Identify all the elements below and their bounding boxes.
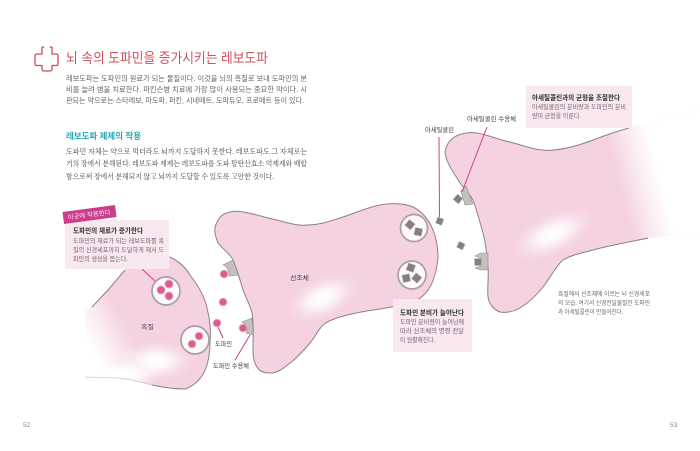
- icon: medical cross: [35, 46, 58, 71]
- receptor: dopamine upper: [223, 260, 238, 276]
- label: dopamine: 도파민: [215, 339, 232, 348]
- vesicle: acetylcholine upper: [400, 214, 428, 242]
- callout: acetylcholine balance: 량이 균형을 이룬다.: [532, 111, 581, 120]
- callout: precursor increases: 도파민의 재료가 되는 레보도파를 흑: [73, 236, 164, 245]
- vesicle: acetylcholine lower: [398, 261, 426, 289]
- callout: precursor increases: [65, 220, 169, 269]
- label: dopamine receptor: 도파민 수용체: [213, 361, 249, 370]
- callout: precursor increases: 도파민의 재료가 증가한다: [73, 226, 144, 235]
- label: substantia nigra: 흑질: [141, 322, 154, 331]
- text block: levodopa action: 도파민 자체는 약으로 먹더라도 뇌까지 도달하지 못한다. 레보도파도 그 자체로는: [66, 146, 308, 156]
- caption: 과 아세틸콜린이 만들어진다.: [558, 308, 623, 316]
- vesicle: dopamine: [181, 326, 209, 354]
- tag: acts here: [62, 205, 116, 224]
- vesicle: dopamine precursor: [152, 277, 180, 305]
- label: acetylcholine: 아세틸콜린: [425, 125, 454, 134]
- acetylcholine molecules: [436, 194, 482, 266]
- callout: precursor increases: 파민의 생성을 돕는다.: [73, 254, 128, 263]
- page number right: 53: [670, 422, 678, 429]
- callout: dopamine secretion increases: [393, 299, 472, 352]
- caption: 흑질에서 선조체에 이르는 뇌 신경세포: [558, 290, 650, 298]
- label: striatum: 선조체: [290, 273, 309, 282]
- dopamine molecules: [213, 270, 247, 332]
- neuron: substantia nigra: [85, 256, 211, 390]
- callout: acetylcholine balance: 아세틸콜린과의 균형을 조절한다: [532, 93, 621, 102]
- tag: acts here: 이곳에 작용한다: [67, 207, 111, 221]
- title: 뇌 속의 도파민을 증가시키는 레보도파: [66, 50, 268, 66]
- callout: dopamine secretion increases: 이 원활해진다.: [400, 335, 435, 344]
- text block: levodopa action: 함으로써 장에서 분해되지 않고 뇌까지 도달할 수 있도록 고안한 것이다.: [66, 171, 274, 181]
- callout: precursor increases: 질의 신경세포까지 도달하게 해서 도: [73, 245, 164, 254]
- text block: levodopa action: 거의 장에서 분해된다. 레보도파 제제는 레보도파를 도파 탈탄산효소 억제제와 배합: [66, 158, 308, 168]
- text block: introduction: [66, 74, 307, 105]
- caption: 의 모습. 여기서 신경전달물질인 도파민: [558, 299, 650, 307]
- caption: [558, 290, 650, 316]
- receptor: acetylcholine right: [475, 253, 488, 270]
- neuron: striatum: [214, 203, 438, 374]
- neuron: acetylcholine side: [440, 105, 700, 320]
- text block: levodopa action: [66, 146, 308, 181]
- callout: dopamine secretion increases: 도파민 분비가 늘어난다: [400, 308, 465, 317]
- text block: introduction: 판되는 약으로는 스타레보, 마도파, 퍼킨, 시네메트, 도파듀오, 프로메트 등이 있다.: [66, 96, 304, 105]
- callout: dopamine secretion increases: 따라 선조체의 명령 전달: [400, 326, 464, 335]
- receptor: dopamine lower: [242, 318, 253, 335]
- page number left: 52: [23, 422, 31, 429]
- label: acetylcholine receptor: 아세틸콜린 수용체: [467, 114, 516, 123]
- receptor: acetylcholine upper: [461, 186, 473, 205]
- text block: introduction: 레보도파는 도파민의 원료가 되는 물질이다. 이것을 뇌의 흑질로 보내 도파민의 분: [66, 74, 307, 83]
- callout: dopamine secretion increases: 도파민 분비량이 늘어남에: [400, 317, 464, 326]
- leader lines: [142, 127, 487, 360]
- callout: acetylcholine balance: 아세틸콜린의 분비량과 도파민의 분비: [532, 102, 626, 111]
- text block: introduction: 비를 늘려 병을 치료한다. 파킨슨병 치료에 가장 많이 사용되는 중요한 약이다. 시: [66, 85, 307, 94]
- heading: levodopa action: 레보도파 제제의 작용: [66, 131, 141, 141]
- callout: acetylcholine balance: [526, 86, 632, 128]
